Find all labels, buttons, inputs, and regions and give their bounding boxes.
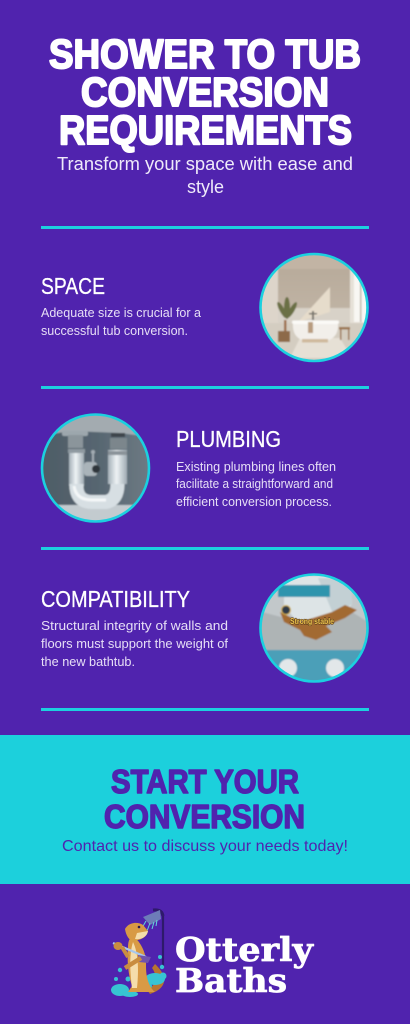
- title: SHOWER TO TUB: [49, 31, 361, 77]
- image: tub support diagram: [260, 574, 368, 685]
- wordmark: Baths: [175, 961, 287, 1000]
- cta heading: START YOUR: [111, 763, 299, 800]
- subtitle: style: [187, 177, 224, 197]
- text: space description: successful tub conversion.: [41, 323, 188, 338]
- wordmark: [175, 930, 314, 1000]
- panel: space: [41, 253, 370, 365]
- heading: space: SPACE: [41, 273, 105, 299]
- image: bathroom with freestanding tub: [260, 253, 370, 365]
- subtitle: [57, 154, 353, 197]
- text: plumbing description: [176, 459, 336, 509]
- cta heading: CONVERSION: [104, 798, 305, 835]
- title: REQUIREMENTS: [59, 107, 352, 153]
- text: compatibility description: the new bathtub.: [41, 654, 135, 669]
- wordmark: Otterly: [175, 930, 314, 969]
- text: compatibility description: floors must support the weight of: [41, 636, 228, 651]
- logo: otterly baths: [111, 910, 314, 1000]
- text: compatibility description: [41, 618, 228, 669]
- caption inside tub image: Strong stable: [290, 616, 334, 626]
- heading: compatibility: COMPATIBILITY: [41, 586, 190, 612]
- text: plumbing description: facilitate a straightforward and: [176, 476, 333, 491]
- text: space description: [41, 305, 202, 338]
- title: CONVERSION: [81, 69, 329, 115]
- image: chrome drain pipe: [41, 414, 151, 525]
- call to action band: [0, 735, 410, 884]
- heading: plumbing: PLUMBING: [176, 426, 281, 452]
- cta heading: [104, 763, 305, 835]
- cta text: Contact us to discuss your needs today!: [62, 838, 348, 855]
- panel: plumbing: [41, 414, 336, 525]
- text: plumbing description: efficient conversion process.: [176, 494, 332, 509]
- icon: otter in shower: [111, 910, 166, 997]
- text: compatibility description: Structural integrity of walls and: [41, 618, 228, 633]
- title: [49, 31, 361, 153]
- text: space description: Adequate size is crucial for a: [41, 305, 202, 320]
- text: plumbing description: Existing plumbing lines often: [176, 459, 336, 474]
- panel: compatibility: [41, 574, 368, 685]
- subtitle: Transform your space with ease and: [57, 154, 353, 174]
